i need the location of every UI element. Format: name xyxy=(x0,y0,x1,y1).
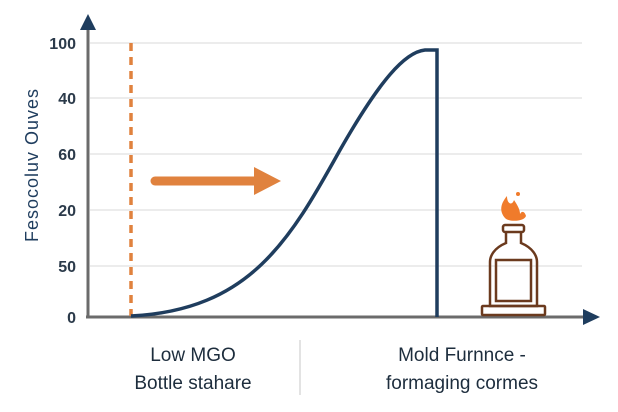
label: left: Low MGO xyxy=(150,345,236,366)
y tick labels: 50 xyxy=(58,259,76,276)
arrow: orange xyxy=(155,167,281,195)
y tick labels xyxy=(49,36,76,327)
y tick labels: 20 xyxy=(58,203,76,220)
label: left: Bottle stahare xyxy=(134,373,252,394)
y axis title: Fesocoluv Ouves xyxy=(22,88,42,242)
divider xyxy=(299,340,301,395)
y tick labels: 60 xyxy=(58,147,76,164)
y tick labels: 0 xyxy=(67,310,76,327)
label: right: formaging cormes xyxy=(386,373,538,394)
label: right xyxy=(386,345,538,394)
label: left xyxy=(134,345,252,394)
y axis xyxy=(80,14,96,318)
dashed marker line xyxy=(129,43,133,316)
x axis xyxy=(86,309,600,325)
y tick labels: 40 xyxy=(58,91,76,108)
label: right: Mold Furnnce - xyxy=(398,345,526,366)
icon: bottle with flame xyxy=(482,192,545,315)
curve xyxy=(131,50,437,317)
y tick labels: 100 xyxy=(49,36,76,53)
